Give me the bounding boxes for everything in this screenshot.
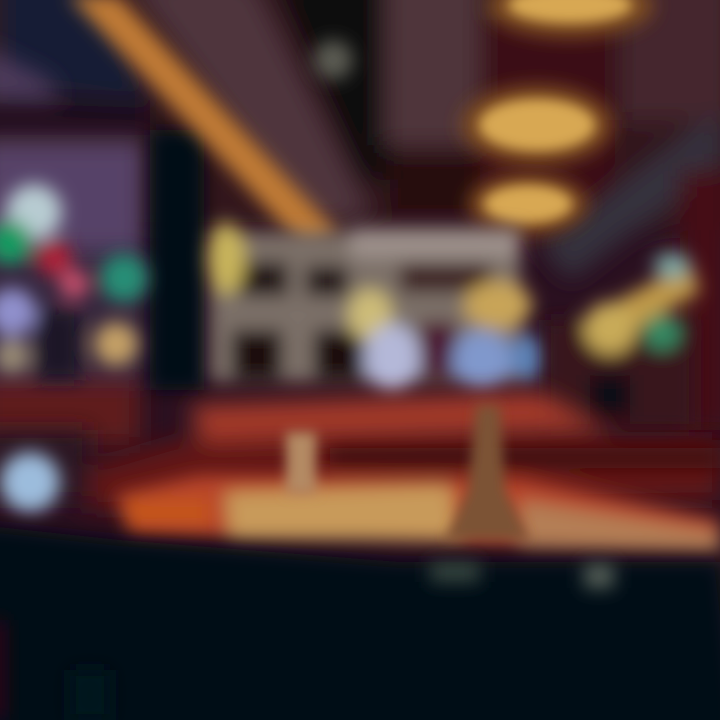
left coloured lights xyxy=(0,184,148,380)
back wall shelving xyxy=(207,222,546,392)
pillar xyxy=(150,130,204,390)
foreground dark counter xyxy=(0,525,720,720)
left wall xyxy=(0,45,150,445)
orange diagonal beam xyxy=(68,0,340,250)
ceiling light xyxy=(313,40,353,80)
chandeliers xyxy=(461,0,654,234)
table: felt surface xyxy=(115,448,720,552)
left blue light xyxy=(0,452,60,512)
dealer figure and centre post xyxy=(286,405,530,540)
table: red rim xyxy=(0,392,720,510)
ceiling xyxy=(0,0,720,430)
right side lights xyxy=(545,252,700,430)
foreground highlights xyxy=(0,562,614,720)
